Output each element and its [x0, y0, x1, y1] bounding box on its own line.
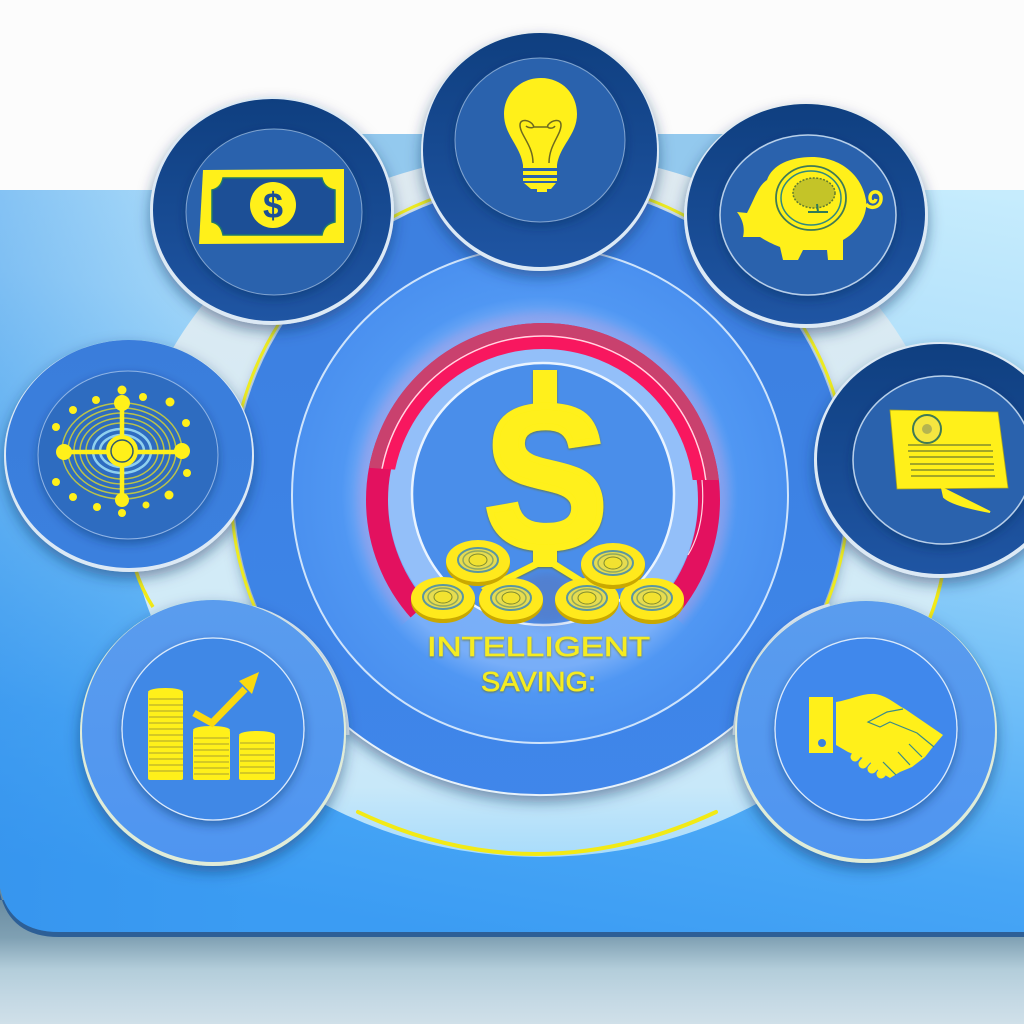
ring lower solid band — [377, 334, 709, 666]
badge outer disc — [6, 340, 252, 568]
pig coin tree crown — [793, 178, 835, 208]
badge outer disc — [687, 104, 925, 324]
badge: handshake — [735, 601, 997, 863]
document text lines — [908, 445, 995, 476]
pig coin tree trunk — [808, 204, 828, 212]
badge inner disc — [38, 371, 218, 539]
floor below the panel — [0, 880, 1024, 1024]
stack one lines — [149, 699, 183, 771]
pen — [942, 488, 990, 512]
disc white edge bottom — [345, 725, 735, 795]
icon: coin stacks with arrow — [148, 672, 275, 780]
badge: document — [814, 342, 1024, 578]
main light blue panel — [0, 134, 1024, 932]
badge rim — [814, 342, 1024, 578]
badge outer disc — [423, 33, 657, 267]
bulb filament — [520, 120, 561, 163]
stack two — [193, 730, 230, 780]
right halo arc — [929, 572, 943, 620]
red gauge ring — [363, 318, 723, 678]
title — [427, 631, 650, 697]
blue inner ripples — [93, 429, 151, 473]
stack one top — [148, 688, 183, 696]
badge inner disc — [720, 135, 896, 295]
ring light inner band — [388, 349, 698, 586]
badge rim — [4, 340, 254, 572]
cuff button — [818, 739, 826, 747]
icon: handshake — [809, 694, 943, 778]
badge inner disc — [853, 376, 1024, 544]
coin — [411, 577, 475, 623]
stack one — [148, 692, 183, 780]
badge inner disc — [122, 638, 304, 820]
badge rim — [684, 104, 928, 328]
coin — [581, 543, 645, 589]
growth arrow head — [239, 672, 259, 694]
badge inner disc — [455, 58, 625, 222]
pale halo ring — [130, 153, 950, 857]
badge outer disc — [817, 344, 1024, 574]
ring glow — [363, 318, 723, 678]
badge rim — [735, 601, 997, 863]
badge rim — [80, 600, 346, 866]
hub ring — [111, 440, 133, 462]
note dollar sign: $ — [263, 185, 283, 226]
dollar S letter: S — [485, 365, 607, 589]
coin — [479, 578, 543, 624]
coin — [620, 578, 684, 624]
badge: growth chart — [80, 600, 347, 866]
bulb glass — [504, 78, 577, 165]
pig tail — [866, 192, 881, 207]
halo yellow arcs — [135, 568, 943, 854]
concentric rings — [62, 403, 182, 499]
stack two lines — [194, 738, 229, 774]
icon: light bulb — [504, 78, 577, 192]
bulb screw base — [523, 164, 557, 192]
ring bright inner band — [381, 335, 707, 480]
cuff — [809, 697, 833, 753]
pig coin inner ring — [781, 171, 841, 225]
pig body — [737, 157, 866, 260]
coin — [555, 578, 619, 624]
badge inner disc — [775, 638, 957, 820]
fingers — [855, 748, 889, 774]
badge: piggy bank — [684, 104, 928, 328]
note medallion — [250, 182, 296, 228]
note center panel — [212, 178, 335, 235]
left halo arc — [135, 568, 153, 607]
white notch around badge — [252, 608, 347, 735]
icon: signed document — [890, 410, 1008, 512]
top stub — [533, 370, 557, 412]
badge: network target — [4, 340, 254, 572]
stack three — [239, 735, 275, 780]
satellite dots — [52, 386, 191, 517]
stack three lines — [240, 743, 274, 773]
ring outer dusty band — [369, 323, 719, 480]
big dollar sign — [481, 365, 607, 593]
left shading of panel — [0, 190, 198, 778]
badge: bank note — [150, 97, 394, 325]
stack three top — [239, 731, 275, 739]
ring white highlight lower right — [688, 480, 703, 555]
badge outer disc — [737, 601, 995, 859]
document seal — [913, 415, 941, 443]
document seal centre — [922, 424, 932, 434]
icon: network — [52, 386, 191, 517]
icon: piggy bank — [737, 157, 881, 260]
darker upper band of panel — [272, 134, 806, 194]
thumb and finger outlines — [868, 709, 934, 775]
icon: bank note — [199, 169, 344, 244]
stack two top — [193, 726, 230, 734]
disc yellow edge — [231, 180, 849, 615]
title line one: INTELLIGENT — [427, 631, 650, 662]
growth arrow — [194, 689, 245, 723]
coin pile — [411, 540, 684, 624]
central blue disc — [231, 180, 849, 796]
shadow under dollar sign — [513, 572, 581, 624]
badge rim — [421, 33, 659, 271]
spoke nodes — [56, 395, 190, 507]
pig coin rings — [776, 166, 846, 230]
badge outer disc — [82, 600, 344, 862]
ring white highlight — [381, 335, 706, 480]
dollar stem and branches — [481, 545, 595, 593]
badge outer disc — [153, 99, 391, 321]
cross spokes — [64, 403, 182, 500]
hub — [107, 436, 137, 466]
white notch around badge — [735, 606, 830, 735]
title line two: SAVING: — [481, 666, 596, 697]
badge inner disc — [186, 129, 362, 295]
inner white circle — [412, 363, 674, 625]
bottom yellow arc — [358, 812, 716, 854]
hands body — [836, 694, 943, 778]
panel edge — [0, 893, 1024, 937]
document sheet — [890, 410, 1008, 489]
coin — [446, 540, 510, 586]
inner lighter disc — [292, 247, 788, 743]
note body — [199, 169, 344, 244]
badge: light bulb — [421, 33, 659, 271]
badge rim — [150, 97, 394, 325]
